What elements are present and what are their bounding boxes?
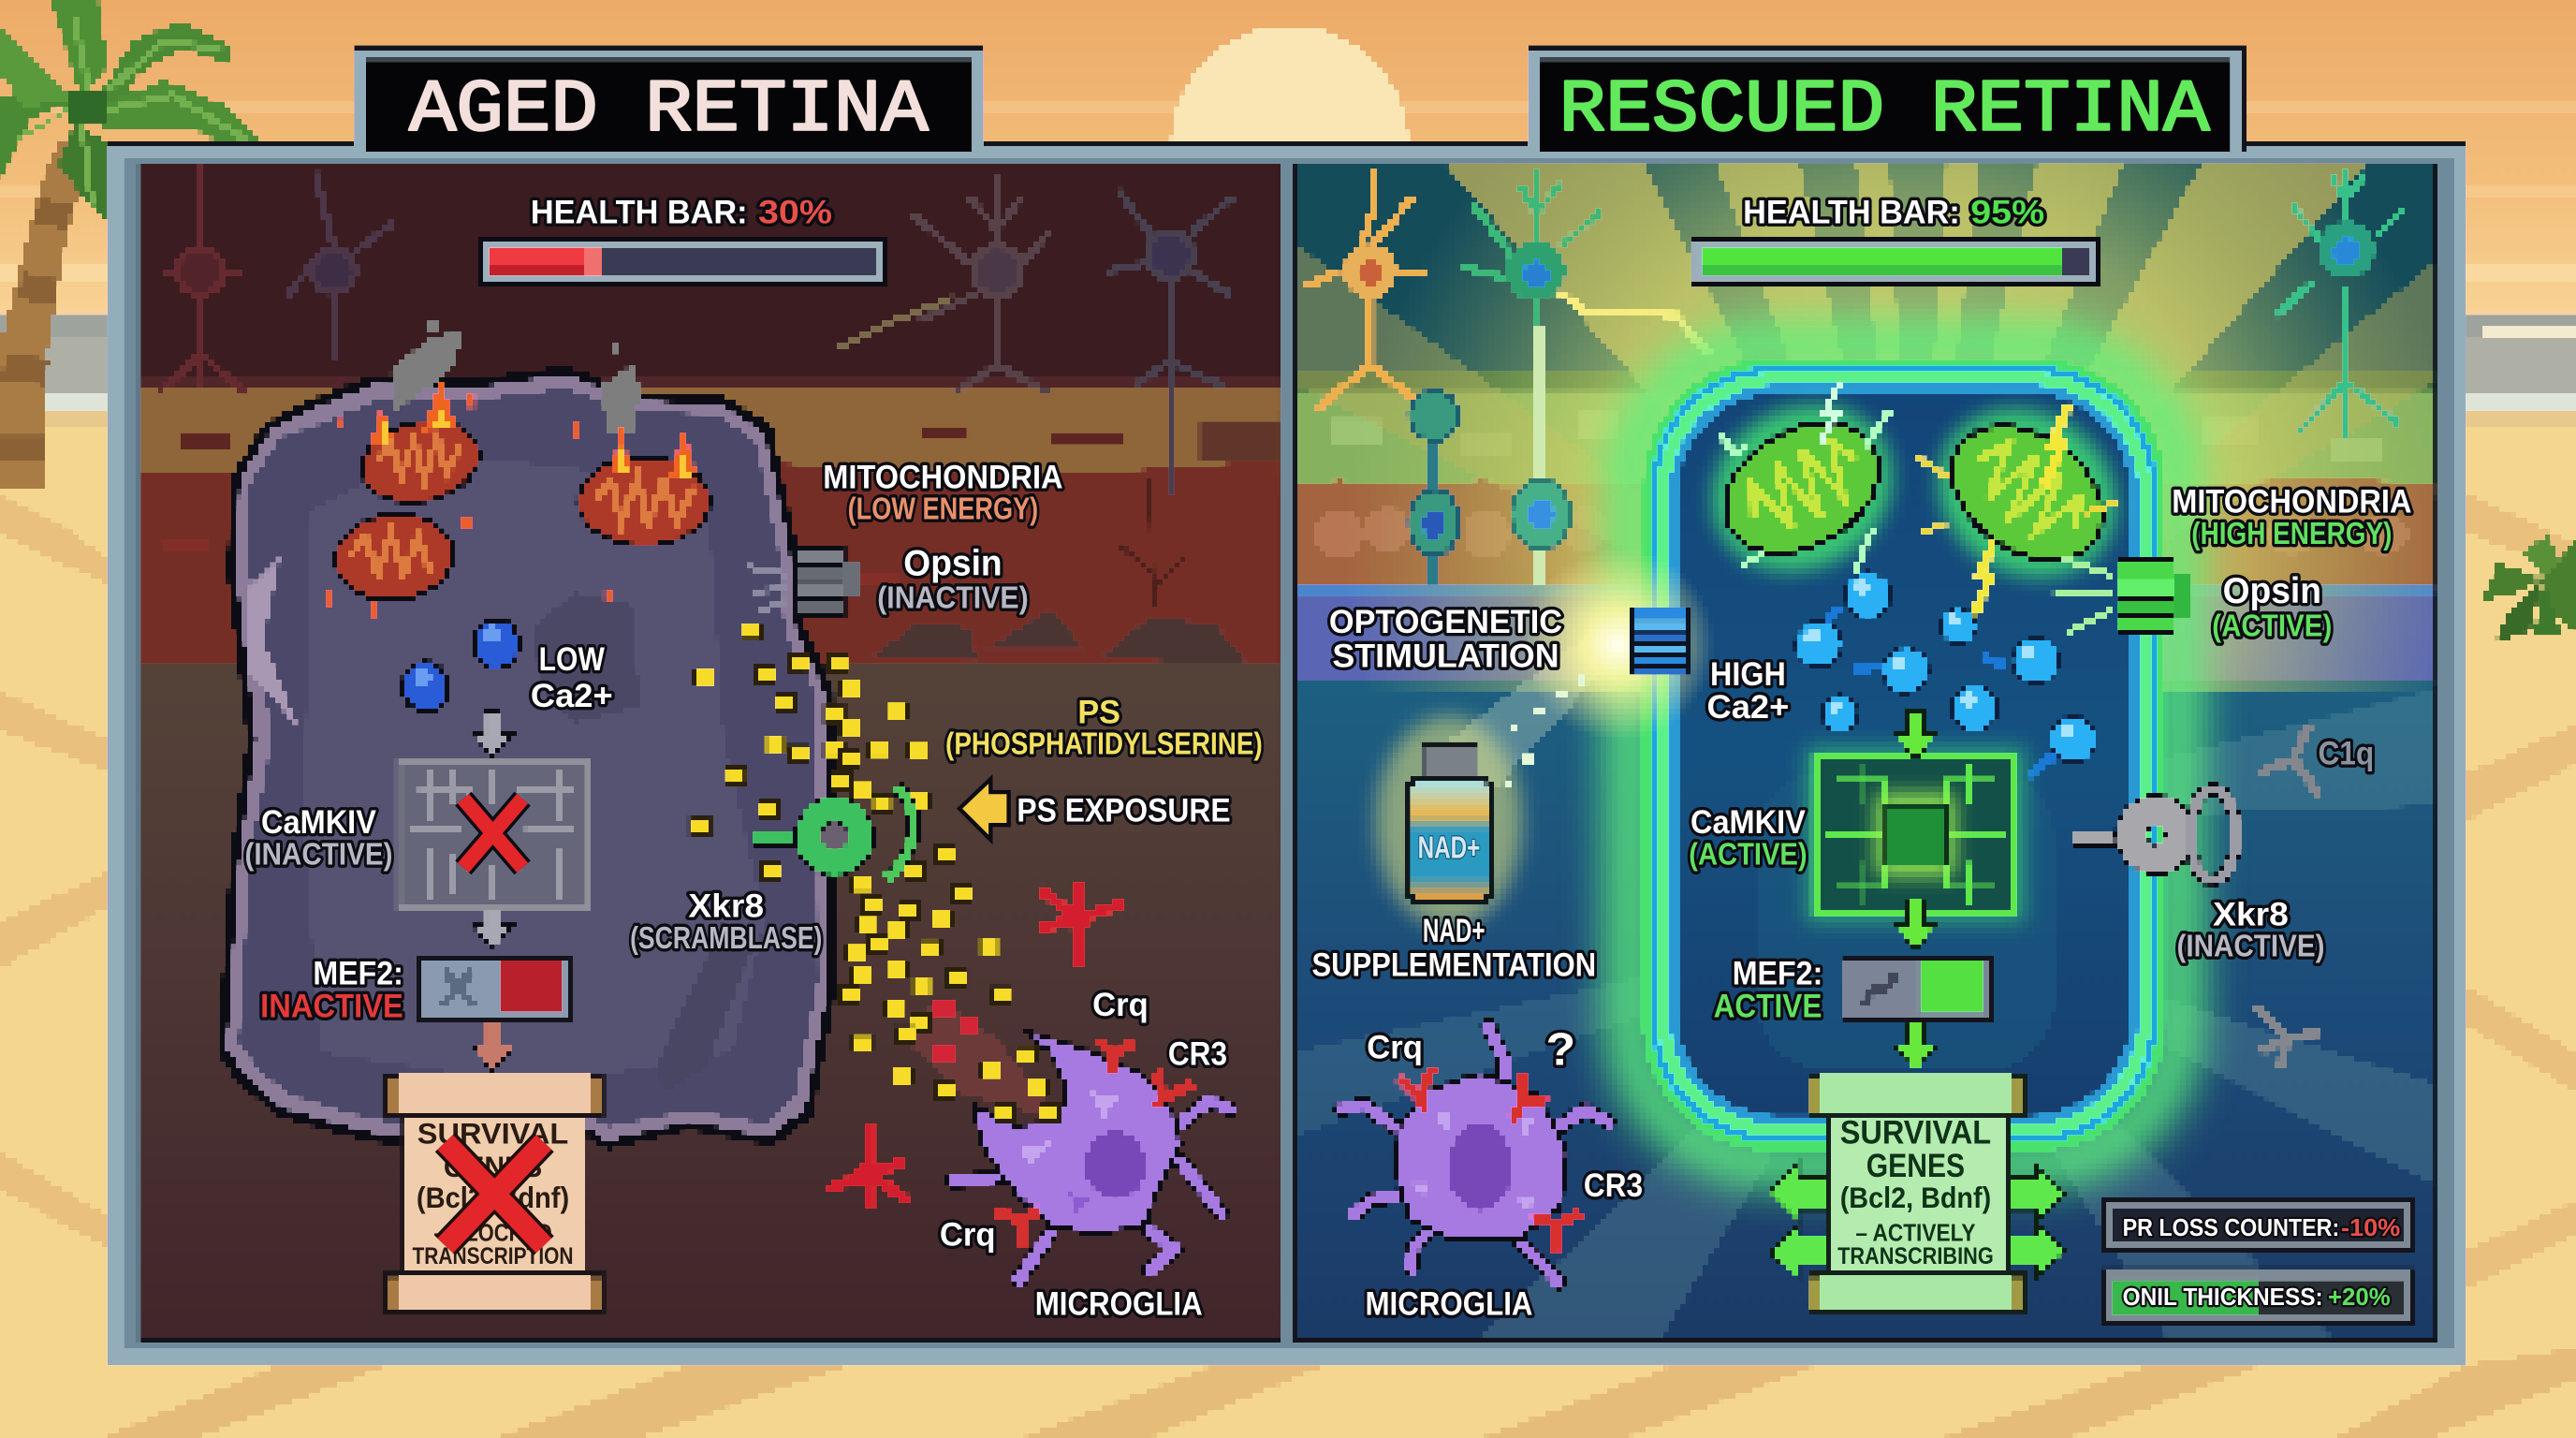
label: mitochondria high energy: (HIGH ENERGY) [2191,517,2392,551]
xkr8 scramblase: green [754,785,914,877]
calcium: low [402,620,520,712]
switch: MEF2 active [1840,953,1995,1024]
microglia: rescued [1340,1025,1608,1284]
neuron: orange [1306,168,1429,411]
scroll text: active: (Bcl2, Bdnf) [1840,1181,1991,1214]
label: opsin active [2212,571,2332,643]
label: mitochondria low energy [823,459,1063,527]
receptors: aged [996,1038,1193,1249]
scroll text: active [1837,1115,1994,1269]
mitochondria: damaged [331,411,710,606]
label: CaMKIV active: (ACTIVE) [1689,837,1808,872]
labels: microglia rescued: CR3 [1584,1167,1643,1204]
labels: microglia aged: Crq [940,1217,996,1254]
cell: rescued photoreceptor [1643,359,2165,1151]
label: MEF2 active: ACTIVE [1714,989,1822,1025]
label: Xkr8 scramblase: Xkr8 [688,888,764,925]
label: CaMKIV inactive: (INACTIVE) [245,837,392,872]
labels: microglia rescued [1365,1024,1643,1322]
label: Xkr8 scramblase: (SCRAMBLASE) [630,921,822,956]
label: opsin inactive [877,543,1029,615]
arrows: rescued pathway [1895,710,1937,1072]
label: mitochondria low energy: (LOW ENERGY) [848,492,1038,527]
xkr8 scramblase: inactive [2073,789,2236,881]
label: CaMKIV active [1689,804,1808,872]
labels: microglia rescued: MICROGLIA [1365,1285,1533,1322]
label: low calcium: Ca2+ [531,678,613,714]
red X outline: CaMKIV [463,799,522,868]
label: MEF2 inactive: MEF2: [313,955,403,991]
microglia: aged [953,1031,1229,1280]
scroll text: blocked: SURVIVAL [417,1117,568,1151]
vial: NAD+ [1377,716,1521,927]
label: opsin inactive: (INACTIVE) [877,580,1029,615]
health label: aged: 30% [758,195,832,231]
panel: aged retina background [143,165,1278,1340]
label: Xkr8 scramblase [630,888,822,956]
neuron: blue green [2276,168,2402,440]
labels: microglia aged: CR3 [1168,1035,1227,1072]
scroll text: blocked: – BLOCKED [433,1218,552,1246]
labels: microglia aged: MICROGLIA [1035,1285,1203,1322]
red particles [933,999,979,1060]
label: PS: (PHOSPHATIDYLSERINE) [945,727,1263,762]
stat text: ONIL thickness: ONIL THICKNESS: [2123,1283,2323,1311]
red X: scroll [446,1142,544,1246]
scroll text: active: TRANSCRIBING [1837,1244,1994,1269]
receptors: rescued [1399,1068,1580,1253]
heading: aged retina: AGED RETINA [409,68,929,153]
label: Xkr8 inactive: (INACTIVE) [2177,930,2324,964]
label: CaMKIV inactive: CaMKIV [261,804,376,841]
smoke [391,319,640,435]
label: CaMKIV inactive [245,804,392,872]
opsin: inactive [748,548,859,616]
label: PS [945,694,1263,762]
switch: MEF2 inactive [417,953,572,1024]
label: high calcium [1707,656,1789,726]
title tab: rescued retina [1526,43,2246,154]
label: mitochondria low energy: MITOCHONDRIA [823,459,1063,495]
stat box: PR loss counter [2100,1198,2417,1254]
label: NAD+ supplementation: SUPPLEMENTATION [1311,947,1596,984]
label: MEF2 inactive [260,955,403,1025]
label: mitochondria high energy [2172,484,2411,551]
label: high calcium: Ca2+ [1707,689,1789,726]
labels: microglia rescued: ? [1546,1024,1575,1076]
icon: left palm tree [0,0,263,490]
label: optogenetic stimulation [1329,604,1562,675]
stat text: PR loss counter: -10% [2341,1213,2400,1241]
text and sharp overlays [245,68,2411,1322]
label: low calcium [531,641,613,714]
metal frame [109,139,2467,1367]
scroll text: active: – ACTIVELY [1855,1218,1976,1246]
health bar: rescued [1689,235,2101,287]
stat text: ONIL thickness: +20% [2328,1283,2391,1311]
scroll text: active: GENES [1866,1148,1965,1184]
icon: right palm tree [2481,535,2576,644]
heading: rescued retina: RESCUED RETINA [1559,68,2210,153]
phagocytosis beam [909,998,1060,1121]
label: MEF2 active [1714,955,1822,1025]
label: optogenetic stimulation: OPTOGENETIC [1329,604,1562,640]
health label: rescued: HEALTH BAR: [1743,195,1960,231]
panel: rescued retina background [1298,165,2435,1340]
health label: rescued: 95% [1970,195,2044,231]
neuron: green [1462,168,1602,411]
label: C1q: C1q [2318,735,2374,771]
side arrows [1769,1164,2065,1279]
labels: microglia aged: Crq [1092,987,1149,1023]
label: Xkr8 inactive [2177,896,2324,964]
label: opsin active: Opsin [2223,571,2321,611]
label: MEF2 inactive: INACTIVE [260,989,403,1025]
chip: active CaMKIV [1808,748,2024,922]
label: PS: PS [1077,694,1120,730]
label: opsin active: (ACTIVE) [2212,609,2332,643]
light beam: optogenetic [1429,549,1714,805]
neurons: rescued retina [1306,168,2402,583]
scroll text: blocked: GENES [444,1150,542,1183]
labels: microglia rescued: Crq [1367,1029,1423,1065]
dim neurons: aged retina [157,165,1232,493]
mitochondria: healthy [1683,374,2148,610]
C1q stars: aged [828,883,1122,1208]
label: Xkr8 inactive: Xkr8 [2213,896,2289,932]
scroll text: active: SURVIVAL [1840,1115,1991,1152]
health bar: aged [476,235,887,287]
scroll text: blocked: (Bcl2, Bdnf) [417,1181,569,1214]
cell: aged photoreceptor [217,365,838,1151]
label: NAD+ supplementation: NAD+ [1423,913,1486,949]
label: mitochondria high energy: MITOCHONDRIA [2172,484,2411,521]
label: MEF2 active: MEF2: [1733,955,1822,991]
cell glow: rescued [1630,345,2178,1164]
label: opsin inactive: Opsin [903,543,1003,583]
opsin: optogenetic stripes [1630,607,1689,677]
scroll text: blocked [413,1117,574,1269]
title tab: aged retina [352,43,986,154]
label: high calcium: HIGH [1710,656,1786,693]
stat box: ONIL thickness [2100,1267,2417,1325]
label: PS exposure: PS EXPOSURE [1017,793,1231,829]
red X outline: scroll [446,1142,544,1246]
stat text: PR loss counter: PR LOSS COUNTER: [2123,1213,2339,1241]
flames [326,381,696,620]
chip: inactive CaMKIV [399,763,590,907]
arrows: aged pathway [472,710,514,1072]
label: low calcium: LOW [539,641,606,678]
scroll text: blocked: TRANSCRIPTION [413,1244,574,1269]
health label: aged: HEALTH BAR: [531,195,748,231]
scroll: blocked survival genes [385,1072,605,1313]
sparkles [1503,677,1586,787]
labels: microglia aged [940,987,1227,1322]
vial label: NAD+: NAD+ [1418,830,1480,865]
arrow: PS exposure [959,779,1009,840]
label: optogenetic stimulation: STIMULATION [1332,638,1559,675]
calcium: high [1795,572,2097,776]
PS particles [690,623,1060,1121]
sun rays behind cell [1298,165,2435,1340]
red X fill: CaMKIV [463,799,522,868]
C1q stars: faded [2254,726,2320,1068]
bipolar cells [1431,387,1438,583]
scroll: active survival genes [1808,1072,2027,1313]
label: CaMKIV active: CaMKIV [1690,804,1806,841]
lightning sparks [1717,381,2119,622]
label: NAD+ supplementation [1311,913,1596,984]
opsin: active [2054,559,2191,635]
